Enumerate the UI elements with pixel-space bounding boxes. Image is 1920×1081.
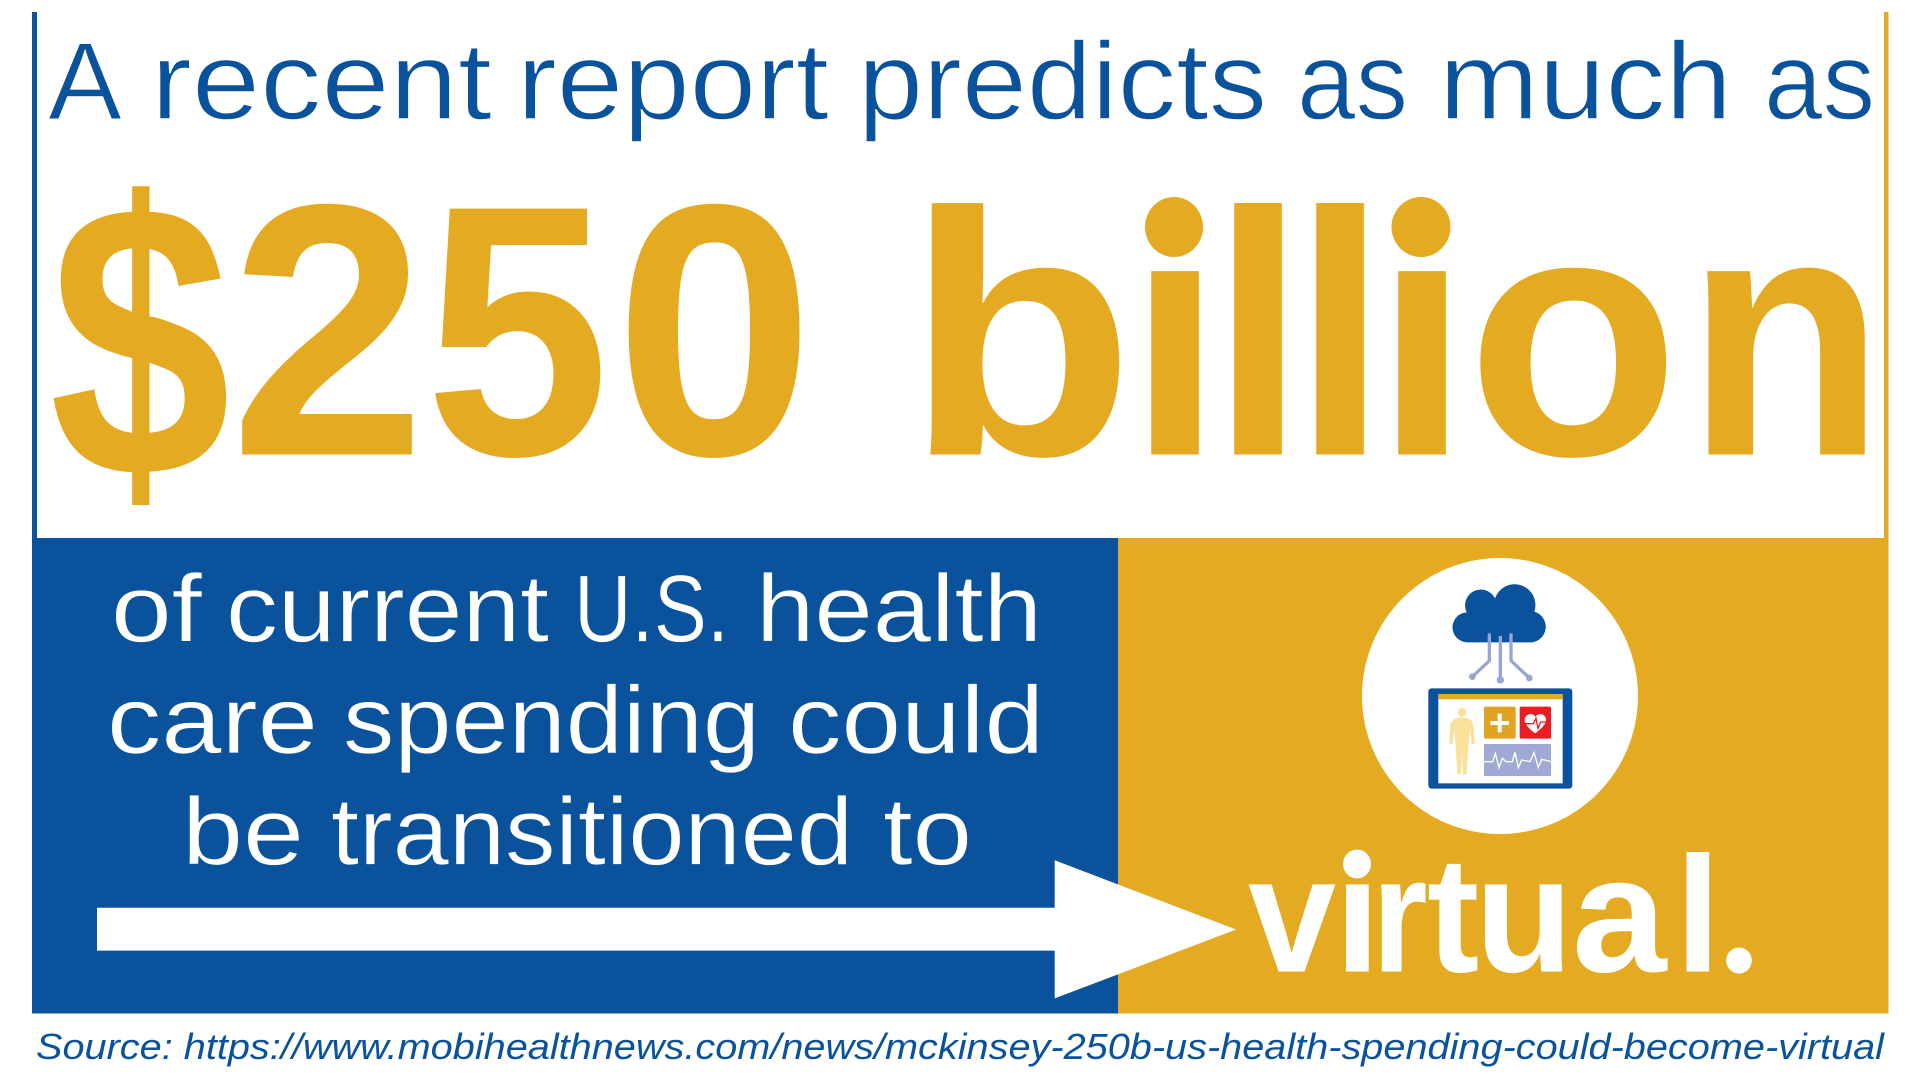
icon: circle with cloud and tablet <box>1362 558 1638 834</box>
heading: virtual.: a <box>1572 823 1668 1007</box>
headline: $250 billion: i <box>1374 140 1470 528</box>
headline: $250 billion: b <box>906 140 1135 528</box>
heading: intro line: as <box>1297 20 1408 143</box>
icon: person <box>1449 708 1475 774</box>
text block: statement <box>107 556 1044 886</box>
icon: heartbeat tile <box>1484 744 1551 776</box>
text block: statement: be <box>182 778 304 886</box>
text block: statement: transitioned <box>331 778 853 886</box>
headline: $250 billion: 2 <box>230 130 426 531</box>
text block: statement: U.S. <box>574 556 729 662</box>
headline: $250 billion: o <box>1467 140 1680 528</box>
heading: virtual.: l <box>1675 822 1721 1006</box>
heading: intro line: as <box>1764 20 1875 143</box>
text block: statement: current <box>226 556 549 662</box>
heading: virtual.: t <box>1427 823 1479 1007</box>
heading: virtual.: . <box>1714 822 1760 1006</box>
heading: intro line: A <box>48 20 123 143</box>
panel: blue statement <box>32 538 1118 1014</box>
heading: virtual.: u <box>1475 823 1573 1007</box>
heading: virtual. <box>1248 822 1760 1007</box>
heading: virtual.: v <box>1248 824 1336 1007</box>
text block: statement: could <box>788 667 1044 774</box>
headline: $250 billion: 5 <box>425 132 610 531</box>
headline: $250 billion: l <box>1292 140 1388 528</box>
icon: heart tile <box>1520 707 1551 739</box>
heading: virtual.: r <box>1372 822 1428 1007</box>
heading: intro line: recent <box>151 20 492 143</box>
headline: $250 billion <box>49 123 1885 560</box>
headline: $250 billion: i <box>1127 140 1223 528</box>
text block: statement: to <box>883 778 972 886</box>
icon: cloud <box>1452 584 1546 642</box>
text block: statement: of <box>111 556 202 662</box>
headline: $250 billion: n <box>1686 141 1885 529</box>
headline: $250 billion: l <box>1210 140 1306 528</box>
icon: tablet <box>1428 688 1572 789</box>
heading: virtual.: i <box>1334 822 1380 1006</box>
heading: intro line: report <box>517 20 829 143</box>
icon: network lines <box>1469 633 1533 684</box>
text block: statement: spending <box>343 667 760 774</box>
heading: intro line: much <box>1439 20 1732 143</box>
icon: plus tile <box>1484 707 1516 739</box>
heading: intro line: predicts <box>858 20 1267 143</box>
text block: statement: health <box>756 556 1042 662</box>
text block: statement: care <box>107 667 318 774</box>
heading: intro line <box>48 20 1875 143</box>
headline: $250 billion: $ <box>49 123 231 560</box>
panel: gold virtual <box>1118 538 1888 1014</box>
source line: Source: https://www.mobihealthnews.com/news/mckinsey-250b-us-health-spending-could-become-virtual <box>36 1026 1885 1067</box>
arrow <box>97 860 1236 998</box>
headline: $250 billion: 0 <box>614 131 814 532</box>
